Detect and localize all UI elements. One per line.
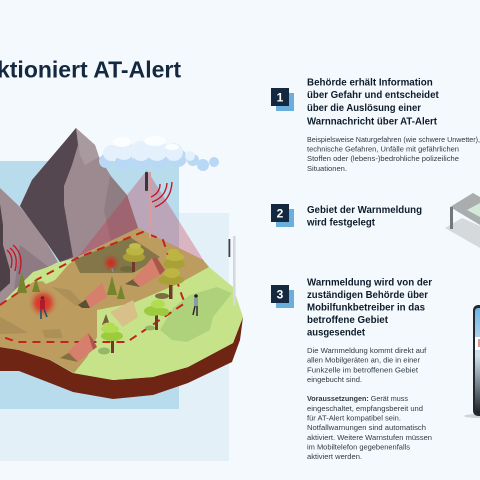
step 3 badge [271,285,294,308]
step 3 requirements: für AT-Alert kompatibel sein. [307,414,401,422]
person: safe right [193,294,198,316]
step 1 badge: 1 [277,90,284,104]
background panel: pale blue [0,213,229,461]
step 3 requirements: aktiviert. Weitere Warnstufen müssen [307,433,432,442]
step 3 badge: 3 [277,288,284,302]
grey tower [228,236,236,306]
signal cone [77,170,204,261]
house: tent B [125,258,165,287]
background panel: mid blue [0,161,179,409]
island: green surface [0,228,243,380]
step 2 heading: wird festgelegt [306,216,375,228]
step 3 body: Funkzelle im betroffenen Gebiet [307,366,418,374]
tree: green front [98,322,123,354]
step 3 heading: Mobilfunkbetreiber in das [307,302,425,314]
step 3 body: Die Warnmeldung kommt direkt auf [307,346,426,355]
step 3 body: eingebucht sind. [307,375,362,384]
step 3 body: allen Mobilgeräten an, die in einer [307,356,421,364]
step 3 heading [307,276,432,338]
house: tent A [78,283,107,308]
step 3 heading: betroffene Gebiet [307,314,388,326]
step 3 body [307,346,426,384]
step 2 heading [306,204,422,228]
step 1 heading: Warnnachricht über AT-Alert [307,116,437,128]
step 3 requirements: eingeschaltet, empfangsbereit und [307,404,423,413]
step 1 body: Stoffen oder (lebens-)bedrohliche polizeiliche [307,154,459,163]
house: cream [110,300,138,327]
mountain: large [20,128,138,262]
illustration: phone [464,305,480,418]
tree: olive back [120,243,145,272]
step 3 requirements: im Mobiltelefon gegebenenfalls [307,442,410,452]
step 3 requirements [307,394,432,461]
warning zone: shaded patches [0,287,87,338]
step 3 heading: ausgesendet [307,326,365,338]
cloud [99,136,219,171]
warning zone: green patch [33,262,68,284]
step 2 badge: 2 [277,206,284,220]
illustration: map table [445,193,480,248]
step 1 body: Situationen. [307,164,347,173]
island [0,228,243,399]
warning zone: tan [0,228,209,373]
left tower signal [7,245,21,274]
island: green blob [160,287,232,342]
step 1 body [307,135,480,173]
step 1 body: Beispielsweise Naturgefahren (wie schwere Unwetter), [307,135,480,144]
step 3 requirements: aktiviert werden. [307,452,362,461]
warning border: dashed line [0,232,185,342]
person: in danger left [33,293,53,319]
tree: olive pair [155,249,185,299]
step 3 heading: Warnmeldung wird von der [307,276,432,288]
person: in danger centre [106,258,116,272]
pine trees [17,272,125,325]
step 1 heading: Behörde erhält Information [307,76,433,88]
step 1 heading: über die Auslösung einer [307,102,421,114]
step 1 heading: über Gefahr und entscheidet [307,89,439,101]
step 2 heading: Gebiet der Warnmeldung [307,204,422,216]
tree: green right [144,300,169,330]
warning zone: dark olive [74,237,160,273]
mountain: left [0,188,58,305]
island: side wall [0,317,243,399]
step 1 body: technische Gefahren, Unfälle mit gefährlichen [307,144,459,154]
step 1 badge [271,88,294,111]
house: tent C [60,333,97,362]
step 1 heading [307,76,439,128]
main tower with signal [145,172,172,238]
step 2 badge [271,204,294,227]
step 3 heading: zuständigen Behörde über [307,289,428,301]
step 3 requirements: Voraussetzungen: Gerät muss [307,394,408,403]
step 3 requirements: Notfallwarnungen sind automatisch [307,423,426,432]
